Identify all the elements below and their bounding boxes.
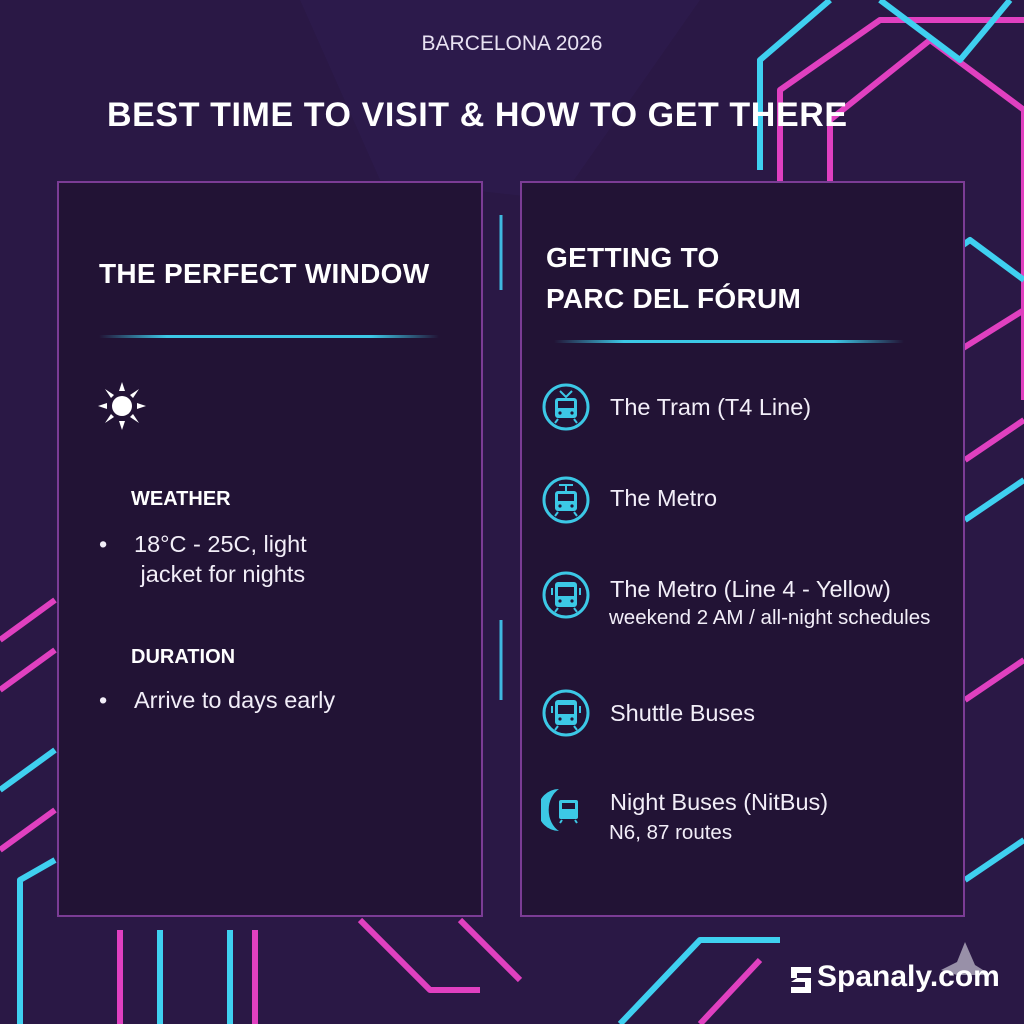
- duration block: DURATION: [131, 646, 235, 668]
- transport: night buses: N6, 87 routes: [609, 821, 732, 844]
- transport: shuttle buses: Shuttle Buses: [610, 700, 755, 726]
- weather block: WEATHER: [131, 488, 231, 510]
- transport: metro line 4: [542, 572, 930, 629]
- heading: THE PERFECT WINDOW: [99, 258, 430, 289]
- weather block: •: [99, 531, 107, 557]
- duration block: [99, 646, 336, 713]
- heading: [546, 242, 801, 314]
- heading: GETTING TO: [546, 242, 720, 273]
- subtitle: BARCELONA 2026: [422, 32, 602, 55]
- transport: night buses: [541, 789, 828, 844]
- weather block: 18°C - 25C, light: [134, 531, 307, 557]
- panel: getting to parc del forum: [520, 181, 965, 917]
- transport: metro: [542, 476, 717, 524]
- logo: Spanaly.com: Spanaly.com: [817, 960, 1000, 993]
- transport: metro: The Metro: [610, 485, 717, 511]
- title: BEST TIME TO VISIT & HOW TO GET THERE: [107, 96, 848, 134]
- transport: shuttle buses: [542, 690, 755, 736]
- transport: metro line 4: weekend 2 AM / all-night schedules: [609, 606, 930, 629]
- logo: Spanaly.com: [791, 942, 1000, 993]
- duration block: Arrive to days early: [134, 687, 335, 713]
- weather block: [99, 488, 307, 587]
- transport: metro line 4: The Metro (Line 4 - Yellow): [610, 576, 891, 602]
- duration block: •: [99, 687, 107, 713]
- transport: tram: The Tram (T4 Line): [610, 394, 811, 420]
- heading: PARC DEL FÓRUM: [546, 283, 801, 314]
- weather block: jacket for nights: [141, 561, 305, 587]
- panel: the perfect window: [57, 181, 483, 917]
- transport: tram: [542, 384, 811, 430]
- transport: night buses: Night Buses (NitBus): [610, 789, 828, 815]
- icon: sun: [98, 382, 146, 430]
